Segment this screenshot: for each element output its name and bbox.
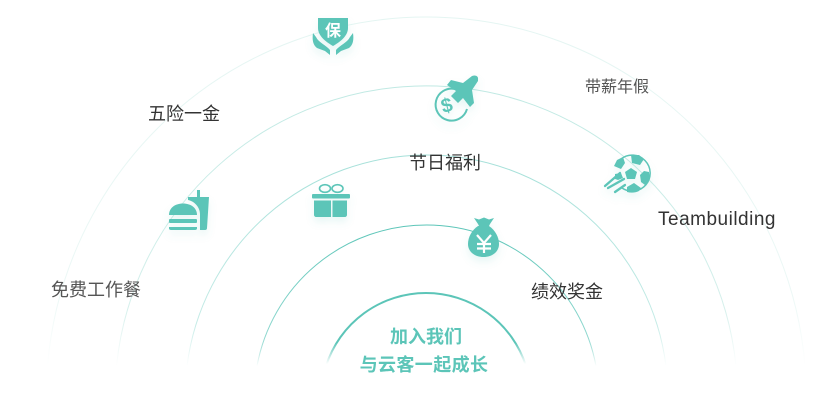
arc 1 bbox=[326, 293, 526, 366]
center heading: 与云客一起成长 bbox=[360, 355, 488, 375]
icon: plane and coin bbox=[436, 76, 478, 121]
center heading: 加入我们 bbox=[390, 327, 462, 347]
arc 5 bbox=[48, 17, 805, 366]
label: 带薪年假: 带薪年假 bbox=[585, 79, 649, 96]
icon: insurance shield and hands: 保 bbox=[325, 22, 341, 40]
label: 节日福利: 节日福利 bbox=[409, 153, 481, 173]
icon: money bag bbox=[468, 218, 499, 257]
arc 3 bbox=[187, 155, 666, 366]
center heading bbox=[360, 327, 488, 375]
label: 免费工作餐: 免费工作餐 bbox=[51, 280, 141, 300]
icon: insurance shield and hands bbox=[313, 18, 353, 55]
label: 五险一金: 五险一金 bbox=[148, 104, 220, 124]
label: Teambuilding: Teambuilding bbox=[658, 209, 776, 230]
arc 4 bbox=[116, 86, 736, 366]
label: 绩效奖金: 绩效奖金 bbox=[531, 282, 603, 302]
icon: gift box bbox=[312, 185, 350, 217]
icon: burger and drink bbox=[169, 190, 209, 230]
icon: soccer ball bbox=[605, 155, 650, 193]
arc 2 bbox=[257, 225, 596, 366]
icon: plane and coin: $ bbox=[439, 94, 455, 118]
